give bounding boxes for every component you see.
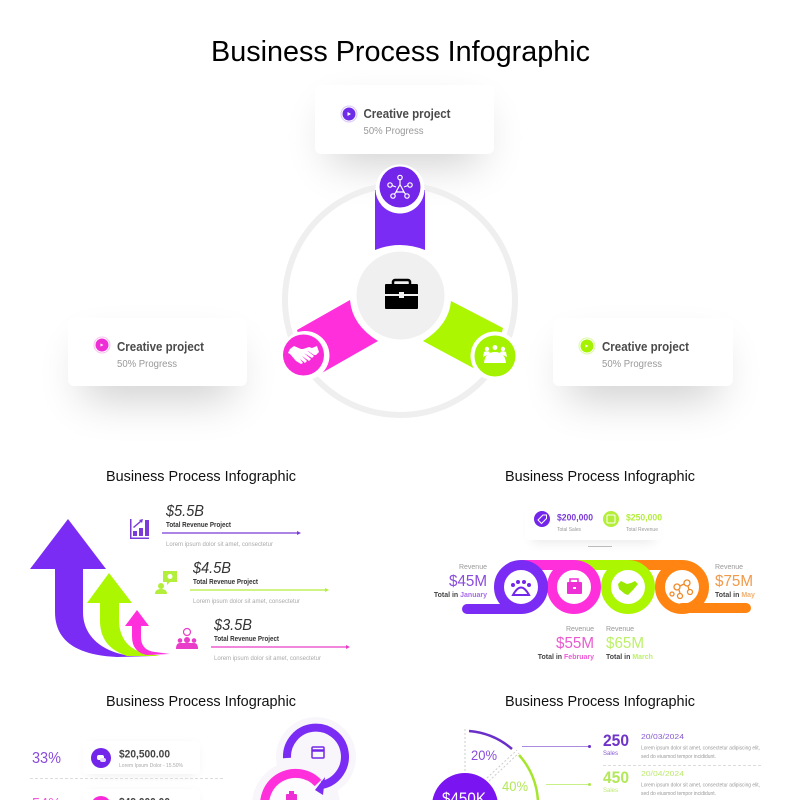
guides	[465, 729, 519, 781]
divider	[588, 546, 612, 548]
entry: 250 sales: 20/03/2024	[641, 732, 684, 741]
center circle	[356, 252, 444, 340]
icon: handshake green	[618, 581, 638, 595]
arrow: purple	[30, 519, 153, 657]
label: january: Total in January	[434, 592, 487, 599]
card: totals: $250,000	[626, 512, 662, 522]
card: left creative project: Creative project	[117, 340, 205, 354]
text block: 5.5B: Total Revenue Project	[166, 522, 232, 529]
label: may: $75M	[715, 573, 753, 590]
icon: bar chart	[130, 519, 149, 539]
panel: revenue timeline	[434, 502, 755, 661]
text block: 4.5B: $4.5B	[192, 560, 231, 577]
icon: nodes orange	[670, 580, 692, 598]
label: january	[434, 564, 487, 599]
text block: 4.5B: Total Revenue Project	[193, 579, 259, 586]
entry: 250 sales: sed do eiusmod tempor incididunt.	[641, 754, 716, 760]
card: top creative project	[315, 85, 494, 162]
text block: 3.5B: Total Revenue Project	[214, 636, 280, 643]
entry: 250 sales: 250	[603, 731, 629, 750]
entry: 450 sales: Sales	[603, 787, 619, 794]
snake: purple	[467, 565, 543, 609]
row: 33 percent	[32, 741, 200, 774]
label: 40 percent: 40%	[502, 778, 528, 794]
label: may	[715, 564, 755, 599]
icon: calendar	[312, 747, 324, 758]
text block: 3.5B: $3.5B	[213, 617, 252, 634]
card: right creative project: Creative project	[602, 340, 690, 354]
label: february: Total in February	[538, 654, 594, 661]
card: totals: Total Revenue	[626, 527, 658, 533]
band: purple	[375, 190, 425, 250]
text block: 5.5B: Lorem ipsum dolor sit amet, consectetur	[166, 542, 273, 548]
label: march	[606, 626, 653, 661]
cycle: purple ring	[287, 728, 345, 795]
entry: 250 sales: Lorem ipsum dolor sit amet, consectetur adipiscing elit,	[641, 746, 760, 752]
text block: 5.5B	[162, 503, 301, 548]
label: march: Total in March	[606, 654, 653, 661]
card: right creative project: 50% Progress	[602, 359, 662, 370]
entry: 250 sales	[603, 731, 760, 760]
entry: 450 sales: Lorem ipsum dolor sit amet, consectetur adipiscing elit,	[641, 782, 760, 788]
heading: timeline panel: Business Process Infographic	[505, 468, 695, 485]
label: march: $65M	[606, 635, 644, 652]
arc: purple 20 percent	[469, 731, 512, 749]
card: top creative project: 50% Progress	[364, 126, 424, 137]
panel: donut with sales	[432, 729, 763, 800]
icon: meeting group	[483, 345, 507, 363]
arrow: green	[87, 573, 160, 656]
entry: 450 sales: sed do eiusmod tempor incididunt.	[641, 791, 716, 797]
icon: briefcase pink	[567, 579, 582, 594]
panel: rising arrows	[30, 503, 350, 662]
band: pink	[297, 300, 378, 378]
divider	[603, 764, 763, 766]
label: february: Revenue	[566, 626, 594, 633]
row: 54 percent	[32, 789, 200, 800]
pointer: green	[546, 783, 591, 786]
row: 33 percent: $20,500.00	[119, 748, 170, 760]
text block: 4.5B: Lorem ipsum dolor sit amet, consectetur	[193, 599, 300, 605]
row: 33 percent: Lorem Ipsum Dolor - 15.50%	[119, 763, 184, 769]
entry: 450 sales	[603, 768, 760, 797]
snake: orange	[628, 565, 746, 609]
text block: 5.5B: $5.5B	[165, 503, 204, 520]
text block: 4.5B	[190, 560, 329, 605]
card: left creative project	[68, 318, 247, 398]
cycle: pink ring	[252, 761, 340, 800]
icon: briefcase	[385, 280, 418, 309]
panel: percent cards and cycle	[30, 717, 356, 800]
node: pink handshake	[280, 331, 330, 380]
text block: 3.5B: Lorem ipsum dolor sit amet, consectetur	[214, 656, 321, 662]
node: green people	[470, 332, 520, 380]
label: january: Revenue	[459, 564, 487, 571]
card: right creative project	[553, 318, 733, 398]
heading: arrows panel: Business Process Infographic	[106, 468, 296, 485]
pointer: purple	[522, 745, 591, 748]
snake: green	[574, 565, 650, 609]
arc: green 40 percent	[519, 755, 538, 800]
arrow: pink	[125, 610, 170, 655]
entry: 450 sales: 450	[603, 768, 629, 787]
label: may: Total in May	[715, 592, 755, 599]
label: march: Revenue	[606, 626, 634, 633]
outer ring	[285, 185, 515, 415]
label: february	[538, 626, 594, 661]
center circle	[432, 773, 498, 800]
icon: network	[388, 175, 412, 198]
text block: 3.5B	[211, 617, 350, 662]
label: february: $55M	[556, 635, 594, 652]
icon: clipboard	[286, 791, 297, 800]
panel: circular process diagram	[68, 85, 733, 415]
entry: 450 sales: 20/04/2024	[641, 769, 684, 778]
entry: 250 sales: Sales	[603, 750, 619, 757]
title: Business Process Infographic	[211, 36, 590, 68]
icon: pin over people	[176, 628, 198, 649]
label: 20 percent: 20%	[471, 747, 497, 763]
node: purple network	[376, 164, 424, 214]
card: totals: $200,000	[557, 512, 593, 522]
card: top creative project: Creative project	[364, 107, 451, 121]
card: totals	[525, 502, 662, 542]
band: green	[423, 301, 503, 377]
card: totals: Total Sales	[557, 527, 581, 533]
icon: handshake	[288, 346, 319, 364]
divider	[30, 778, 224, 780]
card: left creative project: 50% Progress	[117, 359, 177, 370]
row: 33 percent: 33%	[32, 750, 61, 767]
heading: cycle panel: Business Process Infographic	[106, 693, 296, 710]
snake: pink	[521, 565, 596, 609]
label: may: Revenue	[715, 564, 743, 571]
label: january: $45M	[449, 573, 487, 590]
heading: donut panel: Business Process Infographic	[505, 693, 695, 710]
icon: person with speech bubble	[155, 571, 177, 594]
cycle: purple halo	[276, 717, 356, 797]
icon: team	[511, 580, 531, 595]
